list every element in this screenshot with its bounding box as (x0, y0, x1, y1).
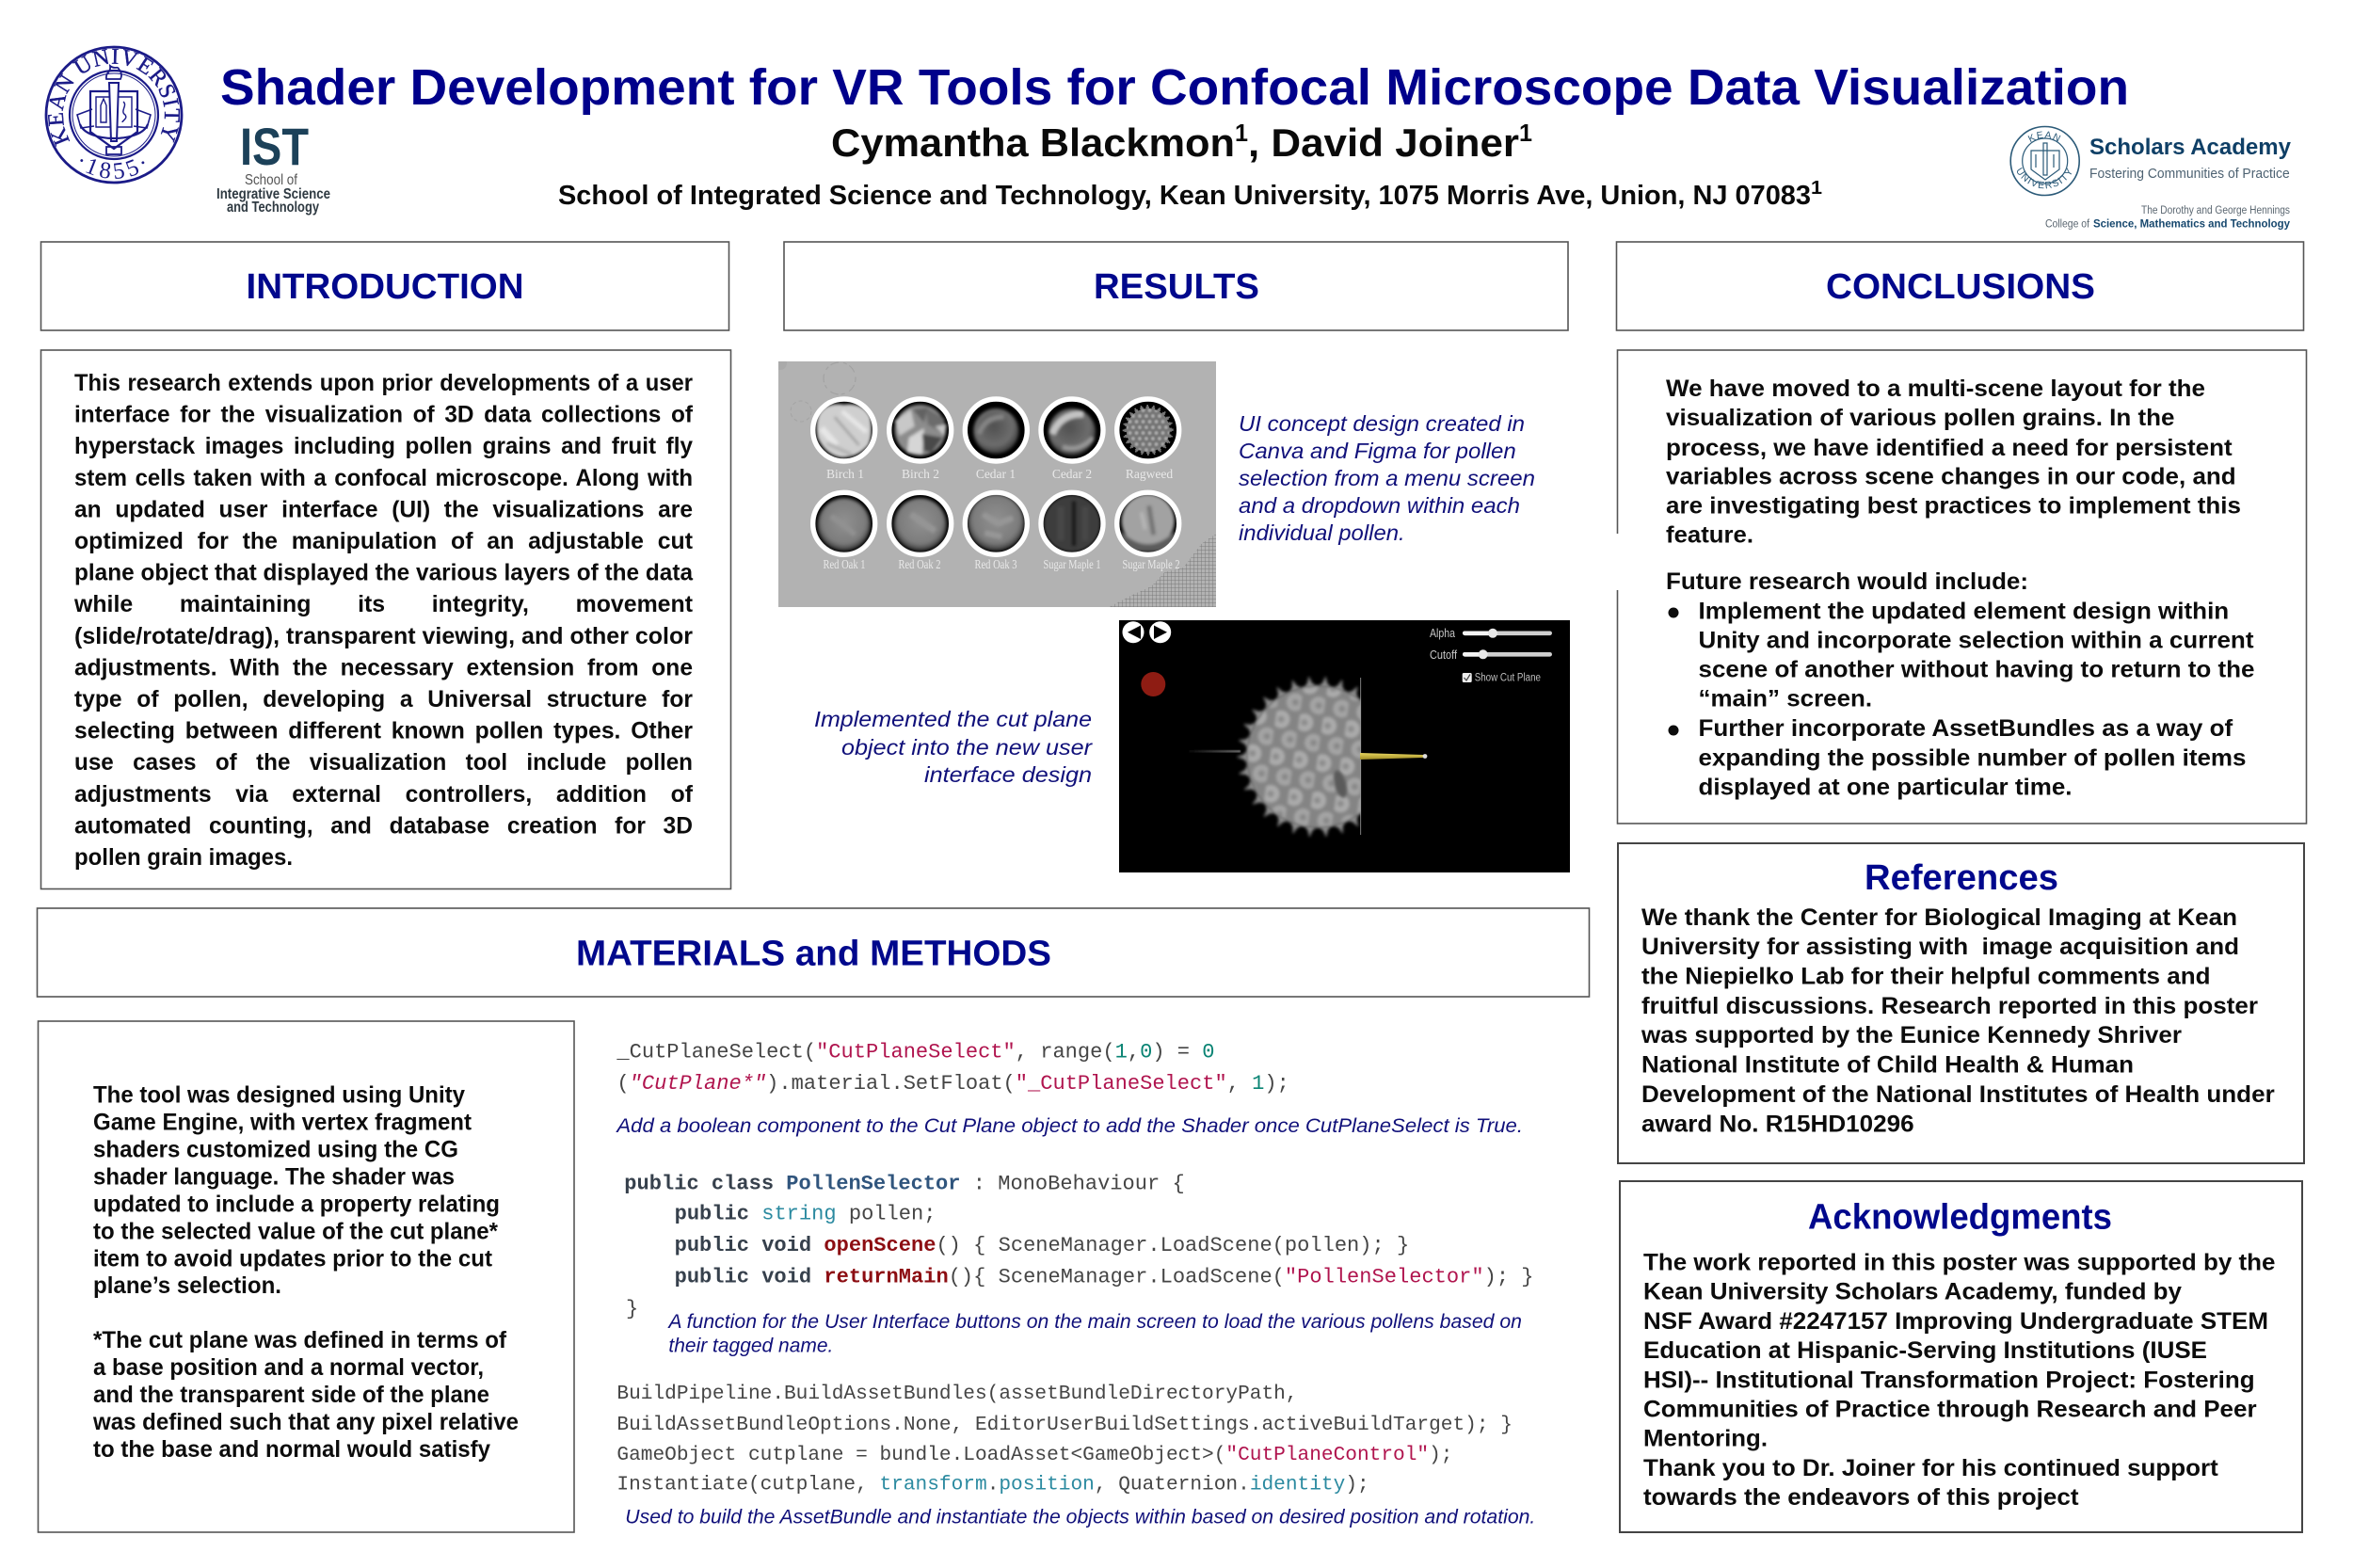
cutoff slider: Cutoff (1430, 648, 1457, 662)
introduction text: hyperstack images including pollen grains and fruit fly (74, 433, 693, 459)
references text: the Niepielko Lab for their helpful comments and (1641, 964, 2210, 990)
code block: cut plane select: ("CutPlane*").material.SetFloat("_CutPlaneSelect", 1); (616, 1072, 1289, 1096)
logo: Kean University seal: ·1855· (80, 159, 145, 179)
future research list: Further incorporate AssetBundles as a way of (1698, 715, 2233, 742)
panel: methods text (38, 1021, 574, 1532)
logo: Scholars Academy: Fostering Communities of Practice (2089, 166, 2290, 182)
pollen button: Cedar 1 (965, 399, 1027, 461)
pollen button labels: Cedar 2 (1052, 467, 1092, 481)
code block: PollenSelector class: public class PollenSelector : MonoBehaviour { (624, 1173, 1185, 1196)
panel: acknowledgments (1620, 1181, 2302, 1532)
code block: cut plane select (616, 1041, 1289, 1096)
alpha slider (1430, 627, 1552, 640)
logo: Kean University seal: KEAN UNIVERSITY (47, 49, 180, 147)
acknowledgments text: NSF Award #2247157 Improving Undergraduate STEM (1643, 1308, 2268, 1335)
acknowledgments text: Thank you to Dr. Joiner for his continued support (1643, 1455, 2218, 1481)
acknowledgments text: towards the endeavors of this project (1643, 1484, 2079, 1511)
pollen button: Birch 2 (889, 399, 952, 461)
caption: implemented cut plane: object into the new user (841, 735, 1093, 760)
introduction text: while maintaining its integrity, movement (73, 591, 694, 617)
caption: UI concept design: individual pollen. (1239, 520, 1405, 545)
heading: conclusions: CONCLUSIONS (1826, 267, 2095, 307)
acknowledgments text: Mentoring. (1643, 1426, 1768, 1452)
code block: PollenSelector class: public void returnMain(){ SceneManager.LoadScene("PollenSelector"); } (675, 1265, 1534, 1289)
conclusions paragraph: variables across scene changes in our code, and (1666, 463, 2236, 489)
pollen button: Cedar 2 (1041, 399, 1103, 461)
pollen button labels: Sugar Maple 2 (1122, 557, 1180, 571)
logo: IST School of Integrative Science and Technology: Integrative Science (216, 186, 330, 202)
code block: asset bundle (616, 1383, 1513, 1496)
paragraph: cut plane definition (92, 1327, 519, 1463)
references text: fruitful discussions. Research reported in this poster (1641, 993, 2258, 1019)
caption: boolean component: Add a boolean component to the Cut Plane object to add the Shader once CutPlaneSelect is True. (615, 1115, 1523, 1137)
introduction text: pollen grain images. (74, 844, 293, 871)
pollen button: Red Oak 3 (965, 492, 1027, 554)
title: Shader Development for VR Tools for Confocal Microscope Data Visualization (220, 59, 2129, 116)
paragraph: unity shader: item to avoid updates prior to the cut (93, 1245, 493, 1272)
introduction text: selecting between different known pollen types. Other (74, 718, 693, 744)
references text: Development of the National Institutes of Health under (1641, 1081, 2275, 1108)
panel: introduction (41, 350, 730, 888)
conclusions paragraph: feature. (1666, 521, 1753, 548)
code block: asset bundle: BuildAssetBundleOptions.None, EditorUserBuildSettings.activeBuildTarget); } (616, 1414, 1513, 1436)
paragraph: unity shader: The tool was designed using Unity (93, 1082, 465, 1109)
affiliation: 1 (1811, 178, 1822, 199)
paragraph: unity shader: plane’s selection. (93, 1272, 281, 1299)
logo: IST School of Integrative Science and Technology (216, 117, 330, 216)
acknowledgments text: Communities of Practice through Research and Peer (1643, 1397, 2257, 1423)
logo: Scholars Academy (2009, 126, 2292, 230)
introduction text: (slide/rotate/drag), transparent viewing, and other color (74, 623, 693, 649)
conclusions paragraph: are investigating best practices to implement this (1666, 493, 2241, 520)
introduction text (73, 370, 694, 871)
logo: Scholars Academy: College of (2045, 218, 2090, 230)
paragraph: unity shader: Game Engine, with vertex fragment (93, 1109, 472, 1135)
introduction text: interface for the visualization of 3D data collections of (74, 402, 694, 428)
introduction text: This research extends upon prior developments of a user (74, 370, 693, 396)
pollen button: Sugar Maple 2 (1117, 492, 1179, 554)
pollen button: Red Oak 1 (813, 492, 875, 554)
references text (1641, 904, 2275, 1137)
future research list: Unity and incorporate selection within a current (1698, 627, 2254, 653)
authors: Cymantha Blackmon (831, 120, 1235, 165)
code block: PollenSelector class: } (626, 1297, 638, 1320)
paragraph: cut plane definition: to the base and normal would satisfy (93, 1436, 490, 1463)
icon: back arrow button (1122, 621, 1144, 643)
code block: cut plane select: _CutPlaneSelect("CutPlaneSelect", range(1,0) = 0 (616, 1041, 1214, 1064)
icon: forward arrow button (1149, 621, 1171, 643)
paragraph: unity shader: shader language. The shader was (93, 1163, 455, 1190)
logo: IST School of Integrative Science and Technology: IST (240, 117, 309, 176)
affiliation: School of Integrated Science and Technology, Kean University, 1075 Morris Ave, Union, NJ 07083 (558, 181, 1811, 211)
pollen button labels: Red Oak 1 (823, 557, 866, 571)
pollen button labels: Birch 2 (902, 467, 939, 481)
code block: asset bundle: Instantiate(cutplane, transform.position, Quaternion.identity); (616, 1474, 1369, 1496)
authors: , David Joiner (1248, 120, 1519, 165)
pollen button labels: Ragweed (1126, 467, 1173, 481)
references text: award No. R15HD10296 (1641, 1111, 1914, 1137)
heading: introduction: INTRODUCTION (247, 267, 523, 307)
pollen button labels: Birch 1 (826, 467, 864, 481)
acknowledgments text (1643, 1250, 2276, 1511)
logo: Scholars Academy: Science, Mathematics and Technology (2093, 216, 2290, 230)
introduction text: type of pollen, developing a Universal structure for (74, 686, 693, 712)
logo: Scholars Academy: KEAN (2027, 132, 2061, 142)
code block: asset bundle: GameObject cutplane = bundle.LoadAsset<GameObject>("CutPlaneControl"); (616, 1444, 1452, 1466)
logo: Scholars Academy: Scholars Academy (2089, 135, 2292, 160)
code block: PollenSelector class: public void openScene() { SceneManager.LoadScene(pollen); } (675, 1234, 1409, 1257)
acknowledgments text: Education at Hispanic-Serving Institutions (IUSE (1643, 1337, 2207, 1364)
pollen grain cut by plane (1186, 678, 1427, 835)
introduction text: use cases of the visualization tool include pollen (74, 749, 693, 776)
conclusions paragraph (1666, 376, 2241, 548)
figure: cut plane in new user interface (1119, 620, 1570, 872)
code block: PollenSelector class (624, 1173, 1534, 1320)
heading: materials and methods: MATERIALS and METHODS (576, 934, 1051, 973)
conclusions paragraph: visualization of various pollen grains. In the (1666, 405, 2175, 431)
introduction text: plane object that displayed the various layers of the data (74, 560, 694, 586)
logo: IST School of Integrative Science and Technology: School of (245, 172, 297, 188)
paragraph: cut plane definition: a base position and a normal vector, (93, 1354, 484, 1381)
caption: user interface buttons function: their tagged name. (668, 1336, 833, 1357)
caption: asset bundle build: Used to build the AssetBundle and instantiate the objects within based on desired position and rotation. (625, 1506, 1535, 1528)
pollen button labels: Cedar 1 (976, 467, 1016, 481)
code block: PollenSelector class: public string pollen; (675, 1203, 936, 1226)
pollen button: Ragweed (1117, 399, 1179, 461)
acknowledgments text: The work reported in this poster was supported by the (1643, 1250, 2276, 1276)
caption: UI concept design (1239, 411, 1535, 545)
caption: UI concept design: Canva and Figma for pollen (1239, 439, 1516, 463)
pollen button labels: Sugar Maple 1 (1043, 557, 1101, 571)
future research list: expanding the possible number of pollen items (1698, 745, 2246, 772)
future research list: scene of another without having to return to the (1698, 657, 2255, 683)
paragraph: cut plane definition: *The cut plane was defined in terms of (93, 1327, 507, 1353)
introduction text: an updated user interface (UI) the visualizations are (74, 496, 693, 522)
paragraph: cut plane definition: and the transparent side of the plane (93, 1382, 489, 1408)
acknowledgments heading: Acknowledgments (1808, 1197, 2112, 1237)
conclusions paragraph: We have moved to a multi-scene layout for the (1666, 376, 2205, 402)
authors: 1 (1519, 119, 1532, 147)
authors (831, 119, 1532, 165)
code block: asset bundle: BuildPipeline.BuildAssetBundles(assetBundleDirectoryPath, (616, 1383, 1298, 1405)
panel: conclusions (1615, 350, 2306, 824)
heading: conclusions (1617, 242, 2304, 330)
acknowledgments text: HSI)-- Institutional Transformation Project: Fostering (1643, 1367, 2255, 1393)
paragraph: unity shader (93, 1082, 500, 1299)
future research list: Implement the updated element design within (1698, 599, 2229, 625)
heading: results: RESULTS (1094, 267, 1259, 307)
caption: implemented cut plane: Implemented the cut plane (814, 707, 1092, 731)
cutoff slider (1430, 648, 1552, 662)
paragraph: unity shader: to the selected value of the cut plane* (93, 1218, 498, 1244)
references text: National Institute of Child Health & Human (1641, 1052, 2134, 1079)
references text: was supported by the Eunice Kennedy Shriver (1641, 1022, 2182, 1048)
caption: user interface buttons function (666, 1311, 1522, 1357)
paragraph: cut plane definition: was defined such that any pixel relative (92, 1409, 519, 1435)
paragraph: unity shader: shaders customized using the CG (93, 1137, 458, 1163)
pollen button: Red Oak 2 (889, 492, 952, 554)
logo: Scholars Academy: UNIVERSITY (2017, 168, 2072, 188)
heading: introduction (41, 242, 728, 330)
caption: UI concept design: and a dropdown within each (1239, 493, 1520, 518)
heading: results (784, 242, 1568, 330)
pollen button: Sugar Maple 1 (1041, 492, 1103, 554)
future research list (1666, 568, 2255, 801)
introduction text: stem cells taken with a confocal microscope. Along with (74, 465, 693, 491)
pollen button: Birch 1 (813, 399, 875, 461)
alpha slider: Alpha (1430, 627, 1455, 640)
heading: materials and methods (38, 908, 1589, 997)
logo: Scholars Academy: The Dorothy and George Hennings (2141, 205, 2290, 216)
pollen button labels: Red Oak 2 (898, 557, 941, 571)
future research list: Future research would include: (1666, 568, 2028, 595)
acknowledgments text: Kean University Scholars Academy, funded by (1643, 1279, 2182, 1305)
figure: UI concept design pollen menu (774, 357, 1216, 607)
introduction text: automated counting, and database creation for 3D (74, 812, 693, 839)
show cut plane checkbox: Show Cut Plane (1475, 672, 1541, 683)
paragraph: unity shader: updated to include a property relating (93, 1192, 500, 1218)
introduction text: adjustments. With the necessary extension from one (74, 654, 693, 680)
caption: implemented cut plane (814, 707, 1093, 787)
pollen button labels: Red Oak 3 (975, 557, 1017, 571)
caption: implemented cut plane: interface design (924, 762, 1092, 787)
panel: references (1618, 843, 2304, 1163)
future research list: “main” screen. (1698, 686, 1872, 712)
references heading: References (1865, 858, 2058, 898)
future research list: displayed at one particular time. (1698, 775, 2073, 801)
conclusions paragraph: process, we have identified a need for persistent (1666, 435, 2233, 461)
authors: 1 (1235, 119, 1248, 147)
introduction text: optimized for the manipulation of an adjustable cut (74, 528, 694, 554)
references text: University for assisting with image acquisition and (1641, 934, 2239, 960)
caption: UI concept design: UI concept design created in (1239, 411, 1525, 436)
pollen button labels (823, 467, 1180, 571)
caption: UI concept design: selection from a menu screen (1239, 466, 1535, 490)
references text: We thank the Center for Biological Imaging at Kean (1641, 904, 2237, 931)
icon: red dot (1141, 672, 1165, 696)
introduction text: adjustments via external controllers, addition of (74, 781, 694, 808)
logo: IST School of Integrative Science and Technology: and Technology (227, 200, 319, 216)
caption: user interface buttons function: A function for the User Interface buttons on the main screen to load the various pollens based on (666, 1311, 1522, 1333)
